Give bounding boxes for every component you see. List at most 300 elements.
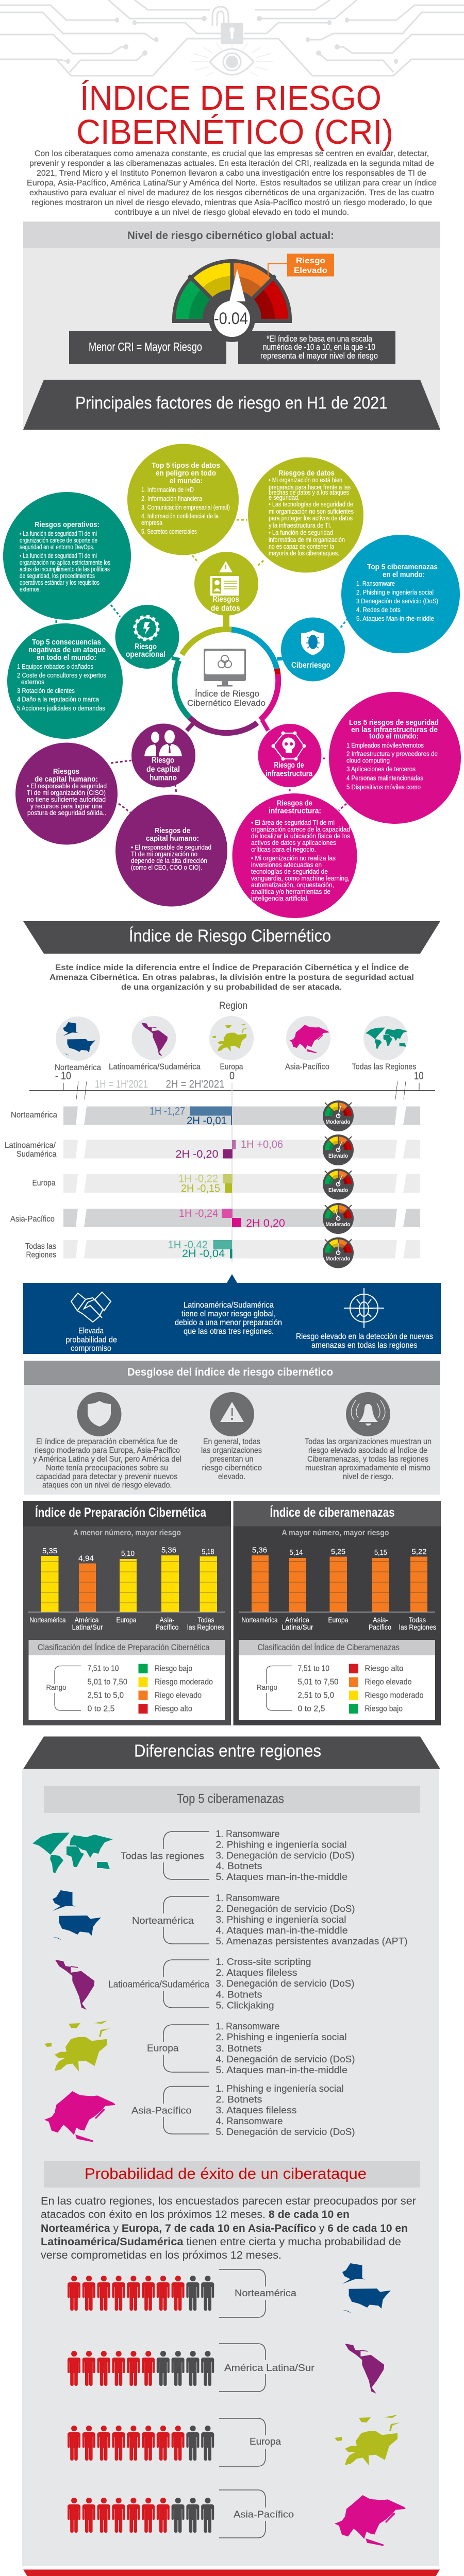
panel: risk index breakdown [24,1361,440,1495]
bar chart: preparedness: América [74,1616,99,1624]
bubble: data risks: • La función de seguridad [269,529,333,536]
region list: Asia-Pacífico: 4. Ransomware [216,2115,283,2126]
bubble: top 5 data types: el mundo: [170,477,203,485]
bar chart: preparedness: Norteamérica [30,1616,66,1624]
note boxes: representa el mayor nivel de riesgo [260,351,378,361]
row: Europa: 2H -0,15 [181,1183,220,1194]
note boxes: numérica de -10 a 10, en la que -10 [263,343,375,352]
panel: global risk level [23,222,440,430]
row: Norteamérica: 1H -1,27 [150,1106,185,1117]
region list: Europa: 5. Ataques man-in-the-middle [216,2064,347,2075]
row: Europa: 1H -0,22 [178,1173,218,1185]
row: Latinoamérica: Latinoamérica/ [5,1141,56,1150]
panel: risk index breakdown: y América Latina y del Sur, pero América del [33,1455,181,1464]
bubble: human capital risks 2: • El responsable de seguridad [131,843,211,851]
bar chart: preparedness: 4,94 [78,1554,94,1563]
bar chart: preparedness: 5,10 [121,1549,135,1558]
classification table: threats: Riesgo moderado [365,1691,424,1700]
region list: all regions: 3. Denegación de servicio (DoS) [216,1850,355,1861]
pictogram row: Norteamérica 8 of 10 [68,2263,391,2317]
central ring: elevated cyber risk index: Cibernético Elevado [187,698,266,708]
panel: risk index breakdown: capacidad para detectar y prevenir nuevos [36,1472,177,1481]
bar chart: threats: 5,25 [331,1548,345,1556]
panel: cyber preparedness index: A menor número, mayor riesgo [73,1529,181,1537]
bar chart: threats: las Regiones [399,1623,436,1631]
bar chart: preparedness: 5,36 [161,1546,176,1555]
bubble: top 5 consequences: externos [21,678,44,686]
bar chart: threats: Latina/Sur [281,1623,313,1631]
panel: risk index breakdown: riesgo moderado para Europa, Asia-Pacífico [35,1446,180,1455]
bubble: top 5 threats [341,535,460,653]
region legend: Todas las Regiones [352,1062,417,1072]
bar chart: threats: 5,22 [411,1548,427,1556]
mini gauges: Moderado [326,1119,351,1125]
bar chart: preparedness: Asia- [160,1616,175,1624]
region legend: Norteamérica [55,1063,101,1072]
index description [49,962,414,992]
bubble: infrastructure risks: tecnologías de seguridad de [251,868,328,875]
bubble: data risks: Riesgos de datos [278,469,335,478]
classification table: threats: Clasificación del Índice de Ciberamenazas [258,1642,400,1652]
panel: risk index breakdown: nivel de riesgo. [343,1472,393,1481]
callout: elevated risk: Elevado [294,266,327,275]
panel: blue takeaways: debido a una menor preparación [175,1318,282,1327]
bubble: top 5 data types: 5. Secretos comerciales [141,528,197,535]
bubble: operational risks: externos. [20,585,41,593]
bar chart: preparedness: Todas [198,1616,214,1624]
region list: Latinoamérica: Latioamérica/Sudamérica [108,1978,210,1990]
region legend: Region [219,1001,247,1011]
attack probability text: verse comprometidas en los próximos 12 meses. [41,2249,281,2261]
diverging bar chart: index by region: 10 [414,1070,424,1082]
bar chart: preparedness: 5,35 [42,1547,57,1555]
bubble: top 5 consequences: 5 Acciones judiciales o demandas [17,704,105,712]
bar chart: preparedness [28,1546,225,1631]
index description: Este índice mide la diferencia entre el Índice de Preparación Cibernética y el Índice de [55,962,409,972]
classification table: preparedness [29,1640,225,1720]
row: Todas las Regiones [25,1239,232,1260]
bubble: infrastructure node: infraestructura [266,770,312,778]
diverging bar chart: index by region: - 10 [55,1070,71,1082]
region list: Asia-Pacífico: 1. Phishing e ingeniería social [216,2083,343,2094]
bubble: top 5 data types: en peligro en todo [156,469,216,478]
classification table: preparedness: 7,51 to 10 [88,1664,119,1673]
bubble: infrastructure risks: organización carece de la capacidad [251,825,350,833]
classification table: threats: Riesgo alto [365,1664,403,1673]
bubble: top 5 infrastructure risks: 2 Infraestructura y proveedores de [346,750,438,757]
bubble: human capital risks 1: de capital humano: [35,775,98,784]
panel: blue takeaways: Riesgo elevado en la detección de nuevas [296,1332,433,1341]
mini gauges [323,1100,354,1268]
panel: risk index breakdown: ataques con un nivel de riesgo elevado. [42,1481,172,1490]
bubble: infrastructure risks: infraestructura: [269,807,321,815]
classification table: threats: Riego elevado [365,1677,411,1687]
bubble: human capital node: Riesgo [152,756,174,765]
row: Asia-Pacífico [10,1208,285,1229]
classification table: threats: Rango [257,1683,277,1692]
panel: risk index breakdown: riesgo cibernético [202,1464,262,1472]
panel: risk index breakdown: elevado. [218,1472,245,1481]
bubble: operational risks: Riesgos operativos: [35,520,100,529]
bar chart: threats: 5,14 [290,1548,303,1557]
panel: risk index breakdown: riesgo elevado asociado al Índice de [308,1445,427,1455]
classification table: threats [239,1640,435,1720]
diverging bar chart: index by region: 1H = 1H'2021 [95,1078,148,1090]
panel: blue takeaways: amenazas en todas las regiones [311,1341,418,1350]
central ring: elevated cyber risk index: Índice de Riesgo [195,689,259,699]
panel: blue takeaways [23,1274,441,1354]
top 5 threats heading [44,1786,420,1813]
heading: global level: Nivel de riesgo cibernético global actual: [127,230,334,242]
bubble: operational risks: • La función de seguridad TI de mi [20,530,97,537]
intro text: contribuye a un nivel de riesgo global elevado en todo el mundo. [114,208,349,217]
bubble: cyber risk node [281,617,345,681]
region list: Norteamérica: 2. Denegación de servicio (DoS) [216,1903,355,1914]
attack probability text: En las cuatro regiones, los encuestados parecen estar preocupados por ser [41,2195,416,2207]
classification table: preparedness: Riesgo alto [155,1704,192,1714]
bubble: top 5 infrastructure risks: 4 Personas malintencionadas [346,774,423,782]
bubble: infrastructure risks: vanguardia, como machine learning, [251,874,350,882]
bubble: data risks: • Mi organización no está bien [269,476,342,484]
bubble: top 5 data types: 1. Información de I+D [141,486,194,494]
bubble: data risks [248,457,363,573]
bubble: cyber risk node: Ciberriesgo [291,661,330,670]
classification table: preparedness: Clasificación del Índice de Preparación Cibernética [38,1642,210,1652]
region list: Norteamérica: 5. Amenazas persistentes avanzadas (APT) [216,1936,407,1946]
bubble: data risks: y la infraestructura de TI. [269,521,332,529]
region list: Norteamérica [53,1890,407,1946]
bubble: top 5 consequences: 4 Daño a la reputación o marca [17,696,100,703]
pictogram row: Europa 8 of 10: Europa [250,2436,281,2447]
bubble: top 5 infrastructure risks: 5 Dispositivos móviles como [346,783,421,791]
region list: Norteamérica: 1. Ransomware [216,1892,279,1903]
region legend: Europa [220,1062,243,1072]
region list: Norteamérica: 3. Phishing e ingeniería social [216,1914,346,1925]
bubble: top 5 data types: empresa [141,519,163,527]
bubble: infrastructure risks: Riesgos de [277,799,312,808]
classification table: threats: 7,51 to 10 [298,1664,329,1673]
bubble: operational risks [3,492,131,620]
bar chart: threats: Todas [409,1616,426,1624]
callout: elevated risk [268,253,334,276]
panel: risk index breakdown: En general, todas [203,1437,260,1446]
bubble: top 5 data types: 2. Información financiera [141,495,203,502]
region legend [55,1001,417,1072]
panel: cyber threat index: A mayor número, mayor riesgo [281,1529,389,1537]
mini gauges: Moderado [326,1222,351,1228]
bubble: operational risks: seguridad en el entorno DevOps. [20,543,94,551]
bubble: human capital risks 1: no tiene suficiente autoridad [27,795,106,803]
row: Todas las Regiones: Regiones [26,1251,56,1259]
bubble: top 5 data types [127,444,239,555]
bubble: top 5 threats: en el mundo: [383,570,425,579]
panel: risk index breakdown: Norte tenía preocupaciones sobre su [46,1464,168,1472]
intro text: 2021, Trend Micro y el Instituto Ponemon llevaron a cabo una investigación entre los responsables de TI de [37,169,426,178]
bubble: human capital risks 2 [115,794,227,907]
heading banner: cyber risk index [23,921,440,954]
classification table: threats: Riesgo bajo [365,1704,403,1714]
bar chart: preparedness: Europa [117,1616,137,1624]
central ring: elevated cyber risk index [172,613,284,733]
intro text: regiones mostraron un nivel de riesgo elevado, mientras que Asia-Pacífico mostró un riesgo moderado, lo que [31,198,432,207]
region list: all regions: 1. Ransomware [216,1828,279,1839]
title: ÍNDICE DE RIESGO [80,79,382,117]
heading banner: key survey questions [23,2570,440,2576]
bar chart: preparedness: Pacífico [156,1623,179,1631]
bubble: operational risk node: Riesgo [135,642,157,651]
bubble: human capital risks 1 [15,743,118,845]
bubble: top 5 infrastructure risks: todo el mundo: [369,732,419,741]
panel: cyber threat index: Índice de ciberamenazas [270,1505,395,1520]
index description: de una organización y su probabilidad de ser atacada. [121,983,342,992]
bubble: top 5 infrastructure risks: Los 5 riesgos de seguridad [349,718,439,727]
attack probability text [41,2195,416,2261]
row: Europa: Europa [32,1179,56,1188]
bar chart: threats: Pacífico [369,1623,391,1631]
panel: blue takeaways: tiene el mayor riesgo global, [181,1310,276,1318]
bubble: top 5 threats: 3 Denegación de servicio (DoS) [356,597,438,605]
region list: Europa: 4. Denegación de servicio (DoS) [216,2054,355,2064]
panel: risk index breakdown: Ciberamenazas, y todas las regiones [307,1455,428,1464]
bubble: human capital risks 1: • El responsable de seguridad [27,782,107,790]
mini gauges: Elevado [328,1153,348,1159]
bubble: operational risks: operativos estándar y los requisitos [20,579,100,586]
intro text: Con los ciberataques como amenaza constante, es crucial que las empresas se centren en evaluar, detectar, [35,149,429,158]
gauge: -0.04 [214,309,248,328]
panel: blue takeaways: Latinoamérica/Sudamérica [184,1301,274,1310]
row: Latinoamérica: 2H -0,20 [175,1148,219,1160]
region list: Europa [44,2021,355,2075]
bubble: human capital node: humano [150,774,177,782]
row: Norteamérica: 2H -0,01 [187,1115,227,1127]
row: Todas las Regiones: 1H -0,42 [168,1239,208,1251]
row: Latinoamérica [5,1139,283,1160]
panel: risk index breakdown: Todas las organizaciones muestran un [305,1437,432,1446]
diverging bar chart: index by region [5,1070,435,1268]
panel: risk index breakdown: muestran aproximadamente el mismo [305,1464,430,1472]
panel: blue takeaways: probabilidad de [66,1335,117,1345]
bubble: data risks: no es capaz de contener la [269,543,335,550]
attack probability text: Latinoamérica/Sudamérica tienen entre cierta y mucha probabilidad de [41,2236,401,2248]
bubble: infrastructure risks: inversiones adecuadas en [251,861,322,869]
panel: cyber threat index [233,1501,441,1725]
region list: all regions [32,1828,355,1882]
intro text: prevenir y responder a las ciberamenazas actuales. En esta iteración del CRI, realizada en la segunda mitad de [29,159,434,168]
classification table: threats: 2,51 to 5,0 [298,1691,334,1700]
row: Latinoamérica: 1H +0,06 [241,1139,283,1150]
panel: risk index breakdown: las organizaciones [201,1446,262,1455]
bubble: top 5 infrastructure risks: 1 Empleados móviles/remotos [346,741,424,749]
bubble: human capital risks 2: capital humano: [146,834,199,843]
bubble: operational risks: de seguridad, los procedimientos [20,572,95,580]
bubble: infrastructure risks: automatización, orquestación, [251,881,334,889]
top 5 threats heading: Top 5 ciberamenazas [177,1792,284,1806]
bar chart: preparedness: 5,18 [202,1548,214,1556]
bubble: operational risks: organización carece de soporte de [20,536,97,544]
bubble: human capital risks 2: depende de la alta dirección [131,857,207,865]
region list: Asia-Pacífico: 2. Botnets [216,2094,262,2105]
bubble: operational risks: • La función de seguridad TI de mi [20,552,97,560]
bubble: data risk node with icon: Riesgos [212,595,239,604]
bubble: human capital risks 1: Riesgos [53,767,79,776]
row: Todas las Regiones: Todas las [25,1242,56,1251]
bar chart: threats [239,1546,436,1631]
heading banner: regional differences: Diferencias entre regiones [134,1741,321,1760]
attack probability text: atacados con éxito en los próximos 12 meses. 8 de cada 10 en [41,2209,350,2221]
bubble: top 5 data types: 4. Información confidencial de la [141,512,219,520]
region list: Europa: 1. Ransomware [216,2021,279,2031]
region list: all regions: 4. Botnets [216,1860,262,1871]
panel: cyber preparedness index: Índice de Preparación Cibernética [35,1505,207,1520]
bubble: top 5 infrastructure risks [329,692,461,824]
bar chart: preparedness: Latina/Sur [72,1623,103,1631]
region legend: Latinoamérica/Sudamérica [109,1062,201,1072]
region list: Latinoamérica: 1. Cross-site scripting [216,1956,311,1967]
bubble: human capital risks 2: (como el CEO, COO o CIO). [131,863,202,871]
bubble: infrastructure risks: críticas para el negocio. [251,845,316,853]
row: Latinoamérica: Sudamérica [16,1150,57,1159]
icon: handshake [71,1292,111,1322]
pictogram row: América Latina 6 of 10: América Latina/Sur [224,2362,314,2373]
region list: Latinoamérica [55,1956,355,2010]
note boxes: *El índice se basa en una escala [267,334,373,344]
bubble: top 5 threats: 2. Phishing e ingeniería social [356,588,434,596]
bubble: infrastructure risks: analítica y/o herramientas de [251,888,330,895]
bubble: data risks: mi organización no son suficientes [269,507,354,515]
panel: blue takeaways: Elevada [78,1327,104,1335]
heading banner: principal risk factors [23,380,440,430]
region list: Latinoamérica: 4. Botnets [216,1989,262,2000]
panel: cyber preparedness index [23,1501,231,1725]
panel: blue takeaways: que las otras tres regiones. [184,1327,274,1336]
pictogram row: Asia-Pacífico 7 of 10 [68,2490,406,2546]
bubble: infrastructure node: Riesgo de [274,761,304,770]
bubble: infrastructure node [258,724,322,787]
intro text: exhaustivo para evaluar el nivel de madurez de los riesgos cibernéticos de una organización. Tres de las cuatro [29,189,434,197]
intro text: Europa, Asia-Pacífico, América Latina/Sur y América del Norte. Estos resultados se utilizan para crear un índice [27,179,437,188]
classification table: preparedness: Riesgo bajo [155,1664,192,1673]
panel: risk index breakdown: El índice de preparación cibernética fue de [36,1437,178,1446]
row: Norteamérica [11,1106,232,1127]
bubble: infrastructure risks: de localizar la ubicación física de los [251,832,350,840]
risk factors bubble diagram [3,444,461,918]
classification table: threats: 0 to 2,5 [298,1704,325,1714]
bubble: top 5 threats: 5. Ataques Man-in-the-middle [356,615,434,622]
diverging bar chart: index by region: 0 [229,1070,235,1082]
decorative header circuit with lock and eye [0,0,464,76]
intro text [27,149,437,217]
region list: all regions: Todas las regiones [121,1851,204,1861]
pictogram row: Asia-Pacífico 7 of 10: Asia-Pacífico [234,2509,294,2519]
classification table: preparedness: 2,51 to 5,0 [88,1691,124,1700]
bubble: human capital node [131,723,195,787]
region list: Latinoamérica: 3. Denegación de servicio (DoS) [216,1978,355,1989]
bar chart: threats: 5,15 [374,1548,387,1557]
bubble: human capital risks 2: TI de mi organización no [131,850,197,858]
panel: blue takeaways: compromiso [71,1344,111,1353]
classification table: preparedness: Riesgo moderado [155,1677,213,1687]
attack probability text: Norteamérica y Europa, 7 de cada 10 en Asia-Pacífico y 6 de cada 10 en [41,2223,408,2234]
diverging bar chart: index by region: 2H = 2H'2021 [166,1078,225,1090]
bubble: human capital risks 1: y recursos para lograr una [30,802,103,810]
bubble: data risks: informática de mi organización [269,536,345,544]
panel: risk index breakdown: presentan un [210,1455,254,1464]
bubble: human capital risks 2: Riesgos de [155,826,190,835]
row: Norteamérica: Norteamérica [11,1111,57,1120]
bar chart: threats: 5,36 [252,1546,267,1555]
bar chart: threats: América [285,1616,309,1624]
bubble: data risks: e seguridad. [269,494,300,501]
bubble: data risks: brechas de datos y a los ataques [269,488,349,496]
heading banner: regional differences [23,1736,440,1769]
bubble: top 5 threats: 4. Redes de bots [356,606,401,614]
bubble: top 5 infrastructure risks: en las infraestructuras de [351,725,438,734]
region list: all regions: 5. Ataques man-in-the-middle [216,1871,347,1882]
icon: shield [77,1392,122,1436]
bubble: data risks: mayoría de los ciberataques. [269,549,339,557]
region list: Asia-Pacífico: 5. Denegación de servicio (DoS) [216,2126,355,2137]
region list: Asia-Pacífico: Asia-Pacífico [131,2105,192,2115]
bubble: data risk node with icon [194,552,258,616]
bubble: operational risk node [115,605,179,669]
region list: Asia-Pacífico: 3. Ataques fileless [216,2105,297,2115]
attack probability heading [44,2161,420,2188]
classification table: preparedness: Riego elevado [155,1691,202,1700]
title [76,79,393,151]
bubble: infrastructure risks: activos de datos y aplicaciones [251,839,336,846]
bubble: top 5 consequences: 3 Rotación de clientes [17,687,75,694]
bubble: top 5 consequences: negativas de un ataque [28,646,106,654]
row: Asia-Pacífico: Asia-Pacífico [10,1215,55,1224]
bubble: operational risk node: operacional [126,650,165,659]
bar chart: preparedness: las Regiones [187,1623,224,1631]
heading banner: principal risk factors: Principales factores de riesgo en H1 de 2021 [75,393,388,412]
bubble: top 5 data types: Top 5 tipos de datos [152,461,220,470]
bubble: data risks: para proteger los activos de datos [269,514,353,522]
bubble: infrastructure risks: inteligencia artificial. [251,894,309,902]
region list: Europa: Europa [147,2042,179,2054]
region list: Norteamérica: 4. Ataques man-in-the-middle [216,1925,347,1936]
title: CIBERNÉTICO (CRI) [76,113,393,151]
classification table: preparedness: Rango [46,1683,66,1692]
region legend: Asia-Pacífico [285,1062,329,1072]
note boxes: Menor CRI = Mayor Riesgo [89,340,202,353]
connectors [56,520,348,812]
mini gauges: Elevado [328,1187,348,1193]
bubble: human capital risks 1: TI de mi organización (CISO) [27,789,106,796]
row: Asia-Pacífico: 1H -0,24 [179,1208,218,1219]
icon: warning [210,1392,254,1436]
bubble: top 5 infrastructure risks: cloud computing [346,756,390,765]
bubble: infrastructure risks [232,793,357,918]
row: Asia-Pacífico: 2H 0,20 [246,1217,285,1229]
bubble: infrastructure risks: • El área de seguridad TI de mi [251,819,335,826]
pictogram row: América Latina 6 of 10 [68,2344,384,2394]
panel: risk index breakdown: Desglose del índice de riesgo cibernético [127,1366,333,1378]
bubble: infrastructure risks: • Mi organización no realiza las [251,854,336,862]
icon: alarm bell [346,1392,390,1436]
bubble: top 5 consequences: en todo el mundo: [37,653,96,662]
bar chart: threats: Asia- [373,1616,388,1624]
bubble: operational risks: organización no aplica estrictamente los [20,558,110,566]
row: Todas las Regiones: 2H -0,04 [182,1248,225,1260]
region list: Europa: 3. Botnets [216,2043,262,2054]
bar chart: threats: Norteamérica [241,1616,278,1624]
bubble: data risk node with icon: de datos [211,604,240,613]
bubble: top 5 consequences [7,623,123,739]
classification table: preparedness: 0 to 2,5 [88,1704,114,1714]
pictogram row: Europa 8 of 10 [68,2415,400,2466]
